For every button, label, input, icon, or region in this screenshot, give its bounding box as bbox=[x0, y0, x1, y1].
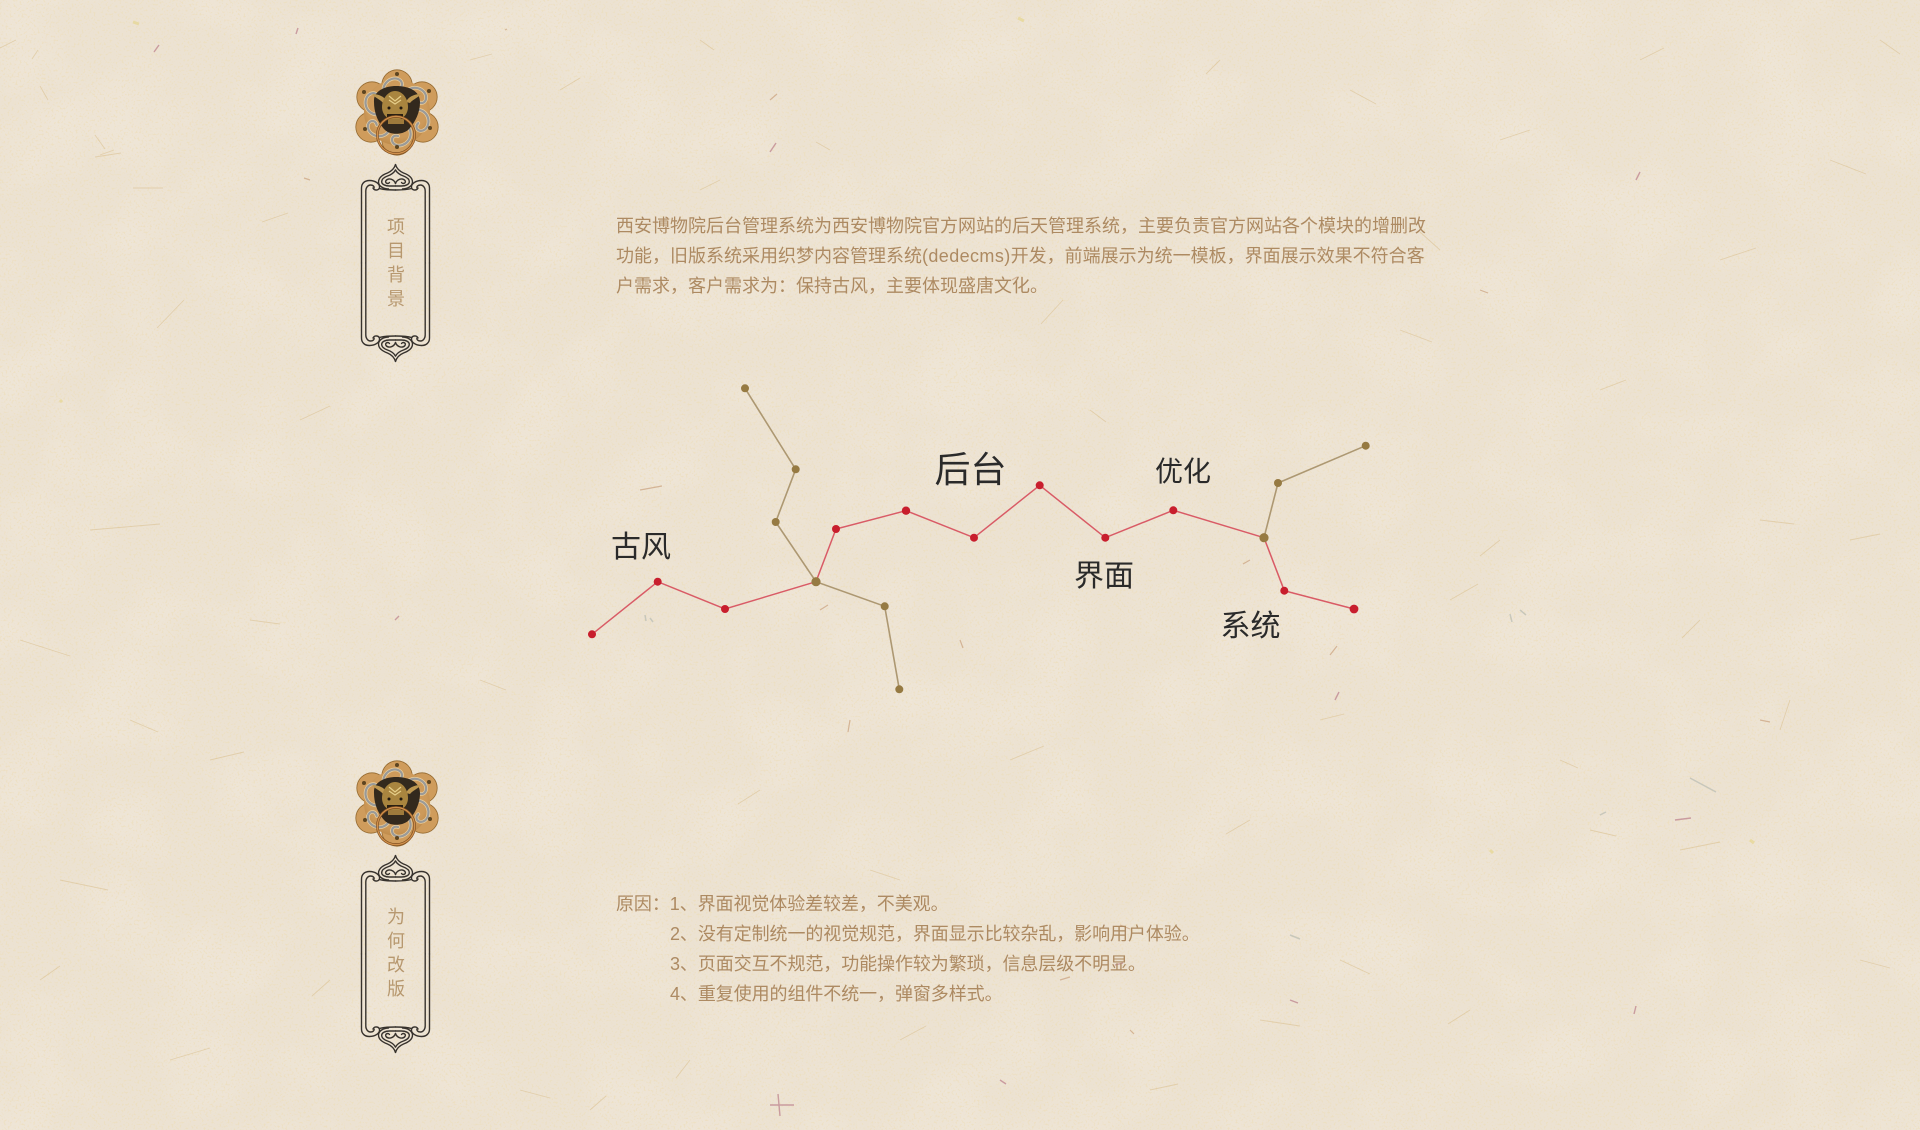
brown branch lines bbox=[745, 388, 1366, 689]
scroll frame bbox=[360, 164, 430, 362]
vertical heading: 为何改版: 改 bbox=[387, 955, 405, 975]
label: 界面: 界面 bbox=[1074, 560, 1134, 593]
vertical heading: 为何改版: 何 bbox=[387, 931, 405, 951]
section tag: project background bbox=[355, 69, 439, 362]
vertical heading: 项目背景: 景 bbox=[387, 288, 405, 308]
label: 后台: 后台 bbox=[934, 448, 1007, 490]
section tag: why redesign bbox=[355, 760, 439, 1054]
reasons list: 3、页面交互不规范，功能操作较为繁琐，信息层级不明显。 bbox=[670, 954, 1146, 974]
label: 优化: 优化 bbox=[1155, 456, 1211, 487]
intro paragraph bbox=[616, 216, 1426, 296]
vertical heading: 为何改版 bbox=[387, 907, 405, 999]
reasons list: 原因：1、界面视觉体验差较差，不美观。 bbox=[616, 894, 948, 914]
red main line bbox=[592, 485, 1354, 634]
intro paragraph: 功能，旧版系统采用织梦内容管理系统(dedecms)开发，前端展示为统一模板，界面展示效果不符合客 bbox=[616, 246, 1425, 266]
keyword constellation chart bbox=[588, 384, 1370, 694]
vertical heading: 为何改版: 版 bbox=[387, 979, 405, 999]
red nodes bbox=[588, 481, 1358, 638]
vertical heading: 项目背景 bbox=[387, 216, 405, 308]
constellation lines and nodes bbox=[588, 384, 1370, 694]
label: 古风: 古风 bbox=[611, 530, 671, 564]
icon: bronze lion door knocker bbox=[355, 760, 439, 847]
scroll frame bbox=[360, 854, 430, 1054]
brown nodes bbox=[741, 384, 1370, 693]
reasons list bbox=[616, 894, 1200, 1004]
label: 系统: 系统 bbox=[1220, 610, 1280, 642]
intro paragraph: 西安博物院后台管理系统为西安博物院官方网站的后天管理系统，主要负责官方网站各个模块的增删改 bbox=[616, 216, 1426, 236]
vertical heading: 为何改版: 为 bbox=[387, 907, 405, 927]
icon: bronze lion door knocker bbox=[355, 69, 439, 156]
intro paragraph: 户需求，客户需求为：保持古风，主要体现盛唐文化。 bbox=[616, 276, 1048, 296]
reasons list: 2、没有定制统一的视觉规范，界面显示比较杂乱，影响用户体验。 bbox=[670, 924, 1200, 944]
vertical heading: 项目背景: 项 bbox=[387, 216, 405, 236]
vertical heading: 项目背景: 目 bbox=[387, 240, 405, 260]
vertical heading: 项目背景: 背 bbox=[387, 264, 405, 284]
reasons list: 4、重复使用的组件不统一，弹窗多样式。 bbox=[670, 984, 1002, 1004]
